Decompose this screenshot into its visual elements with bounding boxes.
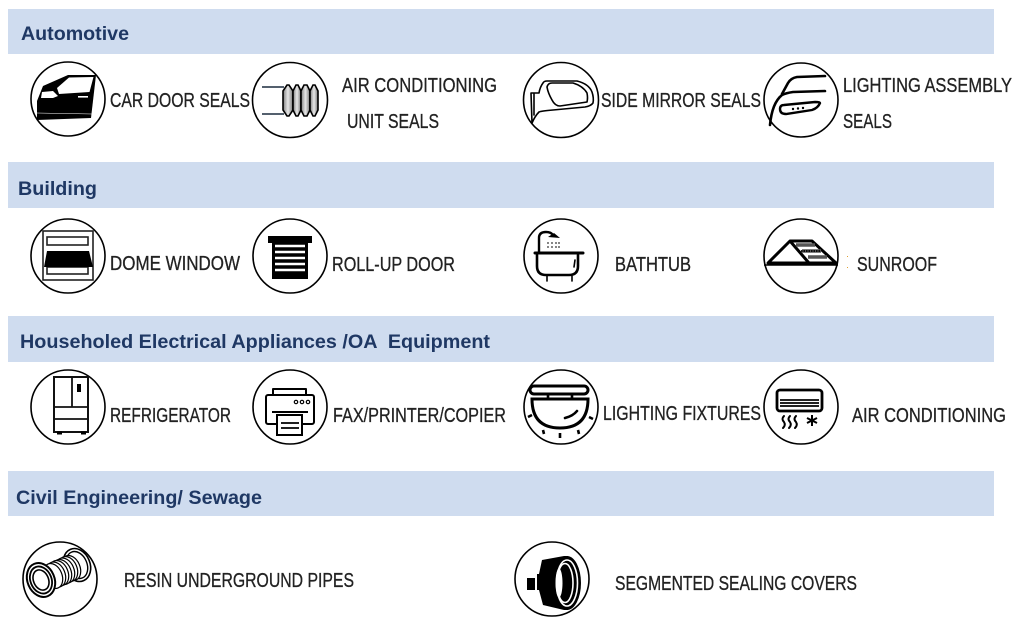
icon: bathtub	[524, 219, 598, 293]
label: refrigerator: REFRIGERATOR	[110, 405, 231, 427]
icon: side mirror	[524, 62, 598, 138]
panel: Building	[8, 162, 994, 293]
icon: dome window	[31, 219, 105, 293]
label: bathtub: BATHTUB	[615, 254, 691, 276]
label: segmented sealing covers: SEGMENTED SEALING COVERS	[615, 573, 857, 595]
panel: Household Electrical Appliances	[8, 316, 1006, 444]
icon: lighting assembly	[764, 63, 838, 137]
label: air conditioning unit seals	[342, 75, 497, 133]
icon: printer	[253, 370, 327, 444]
icon: air conditioner	[764, 370, 838, 444]
heading band: Building	[8, 162, 994, 208]
heading band: Building: Building	[18, 178, 97, 200]
heading band: Automotive: Automotive	[21, 23, 129, 45]
label: car door seals: CAR DOOR SEALS	[110, 90, 250, 112]
label: resin underground pipes: RESIN UNDERGROUND PIPES	[124, 570, 354, 592]
heading band: Civil Engineering / Sewage: Civil Engineering/ Sewage	[16, 487, 262, 509]
heading band: Household Electrical Appliances: Householed Electrical Appliances /OA Equipment	[20, 331, 491, 353]
label: lighting fixtures: LIGHTING FIXTURES	[603, 403, 761, 425]
label: lighting assembly seals	[843, 75, 1012, 133]
icon: segmented sealing cover	[515, 542, 589, 616]
label: roll-up door: ROLL-UP DOOR	[332, 254, 455, 276]
icon: resin pipe	[22, 542, 97, 616]
label: air conditioning unit seals: AIR CONDITIONING	[342, 75, 497, 97]
icon: car door	[31, 62, 105, 136]
panel: Automotive	[8, 9, 1012, 138]
label: sunroof: SUNROOF	[857, 254, 937, 276]
heading band: Household Electrical Appliances	[8, 316, 994, 362]
label: dome window: DOME WINDOW	[110, 253, 240, 275]
icon: air conditioning unit seal	[252, 62, 328, 138]
heading band: Automotive	[8, 9, 994, 54]
icon: refrigerator	[31, 370, 105, 444]
panel: Civil Engineering / Sewage	[8, 471, 994, 616]
icon: sunroof	[764, 219, 838, 293]
label: lighting assembly seals: SEALS	[843, 111, 892, 133]
icon: roll-up door	[253, 219, 327, 293]
label: side mirror seals: SIDE MIRROR SEALS	[601, 90, 761, 112]
label: fax printer copier: FAX/PRINTER/COPIER	[333, 405, 506, 427]
heading band: Civil Engineering / Sewage	[8, 471, 994, 516]
label: air conditioning unit seals: UNIT SEALS	[347, 111, 439, 133]
mark: small dots	[847, 256, 848, 268]
icon: lighting fixture	[524, 370, 598, 444]
